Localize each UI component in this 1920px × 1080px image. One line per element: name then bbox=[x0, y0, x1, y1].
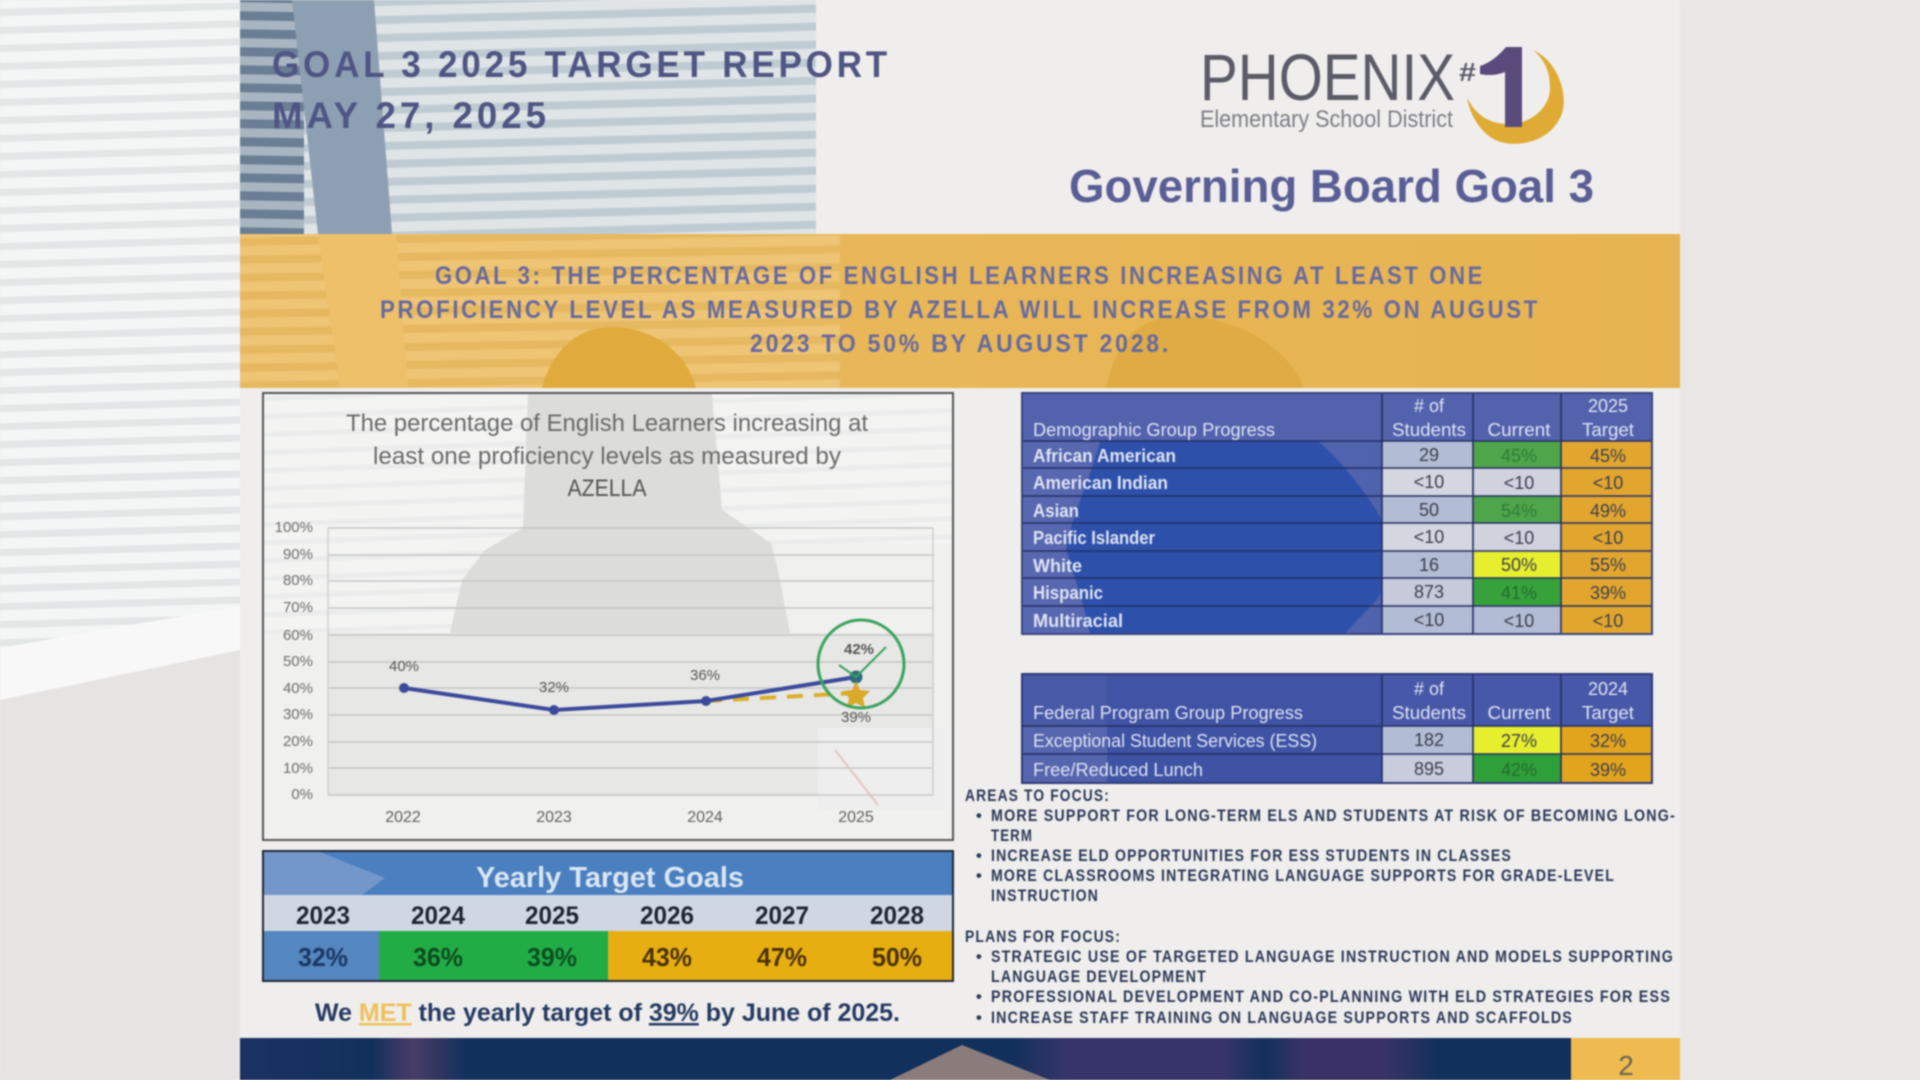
goal banner: GOAL 3: THE PERCENTAGE OF ENGLISH LEARNERS INCREASING AT LEAST ONE bbox=[435, 262, 1485, 290]
y axis labels: 90% bbox=[283, 546, 313, 563]
icon: target star bbox=[842, 681, 870, 708]
demographic values: 55% bbox=[1590, 555, 1626, 575]
federal rows: 895 bbox=[1414, 759, 1444, 779]
values row: 50% bbox=[872, 942, 922, 972]
text block: plans for focus: INCREASE STAFF TRAINING ON LANGUAGE SUPPORTS AND SCAFFOLDS bbox=[991, 1009, 1573, 1027]
years row: 2028 bbox=[870, 902, 924, 930]
demographic values: 39% bbox=[1590, 583, 1626, 603]
data labels: 40% bbox=[389, 658, 419, 675]
federal header: 2024 bbox=[1588, 679, 1628, 699]
text block: areas to focus: TERM bbox=[991, 827, 1033, 845]
chart title: The percentage of English Learners increasing at bbox=[346, 410, 868, 437]
y axis labels: 100% bbox=[275, 519, 313, 536]
data labels: 32% bbox=[539, 679, 569, 696]
federal header: Target bbox=[1582, 703, 1634, 723]
values row: 36% bbox=[413, 942, 463, 972]
demographic row labels: Hispanic bbox=[1033, 583, 1103, 603]
goal banner bbox=[240, 234, 1680, 388]
text block: areas to focus: MORE CLASSROOMS INTEGRATING LANGUAGE SUPPORTS FOR GRADE-LEVEL bbox=[991, 867, 1615, 885]
yearly heading: Yearly Target Goals bbox=[476, 862, 744, 894]
y axis labels: 10% bbox=[283, 760, 313, 777]
text block: areas to focus: INSTRUCTION bbox=[991, 887, 1099, 905]
y axis labels: 50% bbox=[283, 653, 313, 670]
goal banner: PROFICIENCY LEVEL AS MEASURED BY AZELLA WILL INCREASE FROM 32% ON AUGUST bbox=[380, 296, 1540, 324]
demographic header: Students bbox=[1392, 420, 1466, 440]
federal header: Students bbox=[1392, 703, 1466, 723]
federal rows: 182 bbox=[1414, 730, 1444, 750]
logo: Phoenix #1: # bbox=[1459, 57, 1477, 87]
demographic values: 54% bbox=[1501, 501, 1537, 521]
text block: plans for focus: • bbox=[976, 948, 983, 966]
text block: areas to focus: INCREASE ELD OPPORTUNITIES FOR ESS STUDENTS IN CLASSES bbox=[991, 847, 1512, 865]
federal rows: 42% bbox=[1501, 760, 1537, 780]
demographic header: 2025 bbox=[1588, 396, 1628, 416]
data labels bbox=[389, 641, 874, 726]
demographic header: Target bbox=[1582, 420, 1634, 440]
y axis labels: 20% bbox=[283, 733, 313, 750]
demographic values: <10 bbox=[1414, 472, 1444, 492]
values row bbox=[298, 942, 922, 972]
federal rows: 32% bbox=[1590, 731, 1626, 751]
demographic header: # of bbox=[1414, 396, 1445, 416]
demographic values: <10 bbox=[1504, 473, 1534, 493]
x axis labels: 2024 bbox=[687, 809, 723, 826]
demographic values: 29 bbox=[1419, 445, 1439, 465]
federal rows: Free/Reduced Lunch bbox=[1033, 760, 1203, 780]
demographic row labels: African American bbox=[1033, 446, 1176, 466]
demographic row labels: Multiracial bbox=[1033, 611, 1123, 631]
y axis labels bbox=[275, 519, 313, 803]
table: federal program group progress bbox=[1022, 674, 1652, 783]
data labels: 39% bbox=[841, 709, 871, 726]
logo: Phoenix #1 bbox=[1200, 40, 1564, 144]
demographic header: Current bbox=[1488, 420, 1550, 440]
title: GOAL 3 2025 TARGET REPORT bbox=[272, 44, 891, 85]
x axis labels bbox=[385, 809, 874, 826]
y axis labels: 60% bbox=[283, 627, 313, 644]
demographic values: <10 bbox=[1414, 527, 1444, 547]
years row: 2026 bbox=[640, 902, 694, 930]
text block: plans for focus: PLANS FOR FOCUS: bbox=[965, 928, 1121, 946]
data labels: 42% bbox=[844, 641, 874, 658]
federal numeric cells bbox=[1382, 674, 1652, 783]
numeric cells bbox=[1382, 441, 1652, 634]
demographic values: 873 bbox=[1414, 582, 1444, 602]
text block: areas to focus: AREAS TO FOCUS: bbox=[965, 787, 1110, 805]
demographic values: <10 bbox=[1504, 528, 1534, 548]
text block: plans for focus: STRATEGIC USE OF TARGETED LANGUAGE INSTRUCTION AND MODELS SUPPORTING bbox=[991, 948, 1674, 966]
logo: Phoenix #1: Elementary School District bbox=[1200, 106, 1453, 133]
demographic row labels: American Indian bbox=[1033, 473, 1168, 493]
demographic values: <10 bbox=[1504, 611, 1534, 631]
values row: 32% bbox=[298, 942, 348, 972]
y axis labels: 80% bbox=[283, 572, 313, 589]
federal header: Federal Program Group Progress bbox=[1033, 703, 1303, 723]
demographic values: <10 bbox=[1593, 611, 1623, 631]
title: MAY 27, 2025 bbox=[272, 95, 550, 136]
table: demographic group progress bbox=[1022, 393, 1652, 634]
page number bbox=[1571, 1038, 1680, 1080]
demographic values: 49% bbox=[1590, 501, 1626, 521]
values row: 43% bbox=[642, 942, 692, 972]
panel: line chart bbox=[263, 393, 953, 840]
text block: areas to focus: • bbox=[976, 847, 983, 865]
x axis labels: 2022 bbox=[385, 809, 421, 826]
goal banner: 2023 TO 50% BY AUGUST 2028. bbox=[750, 330, 1171, 358]
data labels: 36% bbox=[690, 667, 720, 684]
actual line bbox=[399, 670, 862, 715]
chart title bbox=[346, 410, 868, 502]
y axis labels: 0% bbox=[291, 786, 313, 803]
y axis labels: 40% bbox=[283, 680, 313, 697]
demographic values: <10 bbox=[1414, 610, 1444, 630]
y axis labels: 30% bbox=[283, 706, 313, 723]
years row: 2025 bbox=[525, 902, 579, 930]
chart title: AZELLA bbox=[568, 475, 646, 502]
demographic values: 50% bbox=[1501, 555, 1537, 575]
years row: 2027 bbox=[755, 902, 809, 930]
text block: areas to focus: • bbox=[976, 867, 983, 885]
panel: yearly target goals bbox=[263, 851, 953, 981]
demographic row labels: Asian bbox=[1033, 501, 1079, 521]
statement: met the target: We MET the yearly target of 39% by June of 2025. bbox=[315, 999, 900, 1027]
text block: plans for focus: LANGUAGE DEVELOPMENT bbox=[991, 968, 1207, 986]
federal rows: Exceptional Student Services (ESS) bbox=[1033, 731, 1317, 751]
federal header bbox=[1033, 679, 1634, 723]
federal header: # of bbox=[1414, 679, 1445, 699]
target dashed line bbox=[706, 693, 856, 701]
demographic values bbox=[1414, 445, 1626, 631]
demographic values: 45% bbox=[1501, 446, 1537, 466]
text block: plans for focus bbox=[965, 928, 1674, 1027]
text block: areas to focus: • bbox=[976, 807, 983, 825]
years row: 2023 bbox=[296, 902, 350, 930]
demographic values: <10 bbox=[1593, 473, 1623, 493]
demographic values: 50 bbox=[1419, 500, 1439, 520]
title bbox=[272, 44, 891, 136]
y axis labels: 70% bbox=[283, 599, 313, 616]
federal rows: 27% bbox=[1501, 731, 1537, 751]
callout: 2025 circle with check bbox=[818, 620, 904, 708]
demographic header bbox=[1033, 396, 1634, 440]
years row: 2024 bbox=[411, 902, 465, 930]
demographic values: 45% bbox=[1590, 446, 1626, 466]
demographic header: Demographic Group Progress bbox=[1033, 420, 1275, 440]
logo: Phoenix #1: PHOENIX bbox=[1200, 40, 1455, 114]
values row: 39% bbox=[527, 942, 577, 972]
demographic values: 16 bbox=[1419, 555, 1439, 575]
x axis labels: 2025 bbox=[838, 809, 874, 826]
text block: areas to focus: MORE SUPPORT FOR LONG-TERM ELS AND STUDENTS AT RISK OF BECOMING LONG- bbox=[991, 807, 1676, 825]
years row bbox=[296, 902, 924, 930]
demographic row labels bbox=[1033, 446, 1176, 631]
demographic row labels: Pacific Islander bbox=[1033, 528, 1155, 548]
x axis labels: 2023 bbox=[536, 809, 572, 826]
text block: areas to focus bbox=[965, 787, 1676, 905]
text block: plans for focus: • bbox=[976, 1009, 983, 1027]
footer bar bbox=[240, 1038, 1571, 1080]
heading: Governing Board Goal 3: Governing Board Goal 3 bbox=[1069, 160, 1594, 212]
federal header: Current bbox=[1488, 703, 1550, 723]
text block: plans for focus: • bbox=[976, 988, 983, 1006]
demographic values: <10 bbox=[1593, 528, 1623, 548]
federal rows bbox=[1033, 730, 1626, 780]
demographic values: 41% bbox=[1501, 583, 1537, 603]
demographic row labels: White bbox=[1033, 556, 1082, 576]
chart title: least one proficiency levels as measured by bbox=[373, 443, 841, 470]
text block: plans for focus: PROFESSIONAL DEVELOPMENT AND CO-PLANNING WITH ELD STRATEGIES FOR ESS bbox=[991, 988, 1671, 1006]
federal rows: 39% bbox=[1590, 760, 1626, 780]
values row: 47% bbox=[757, 942, 807, 972]
